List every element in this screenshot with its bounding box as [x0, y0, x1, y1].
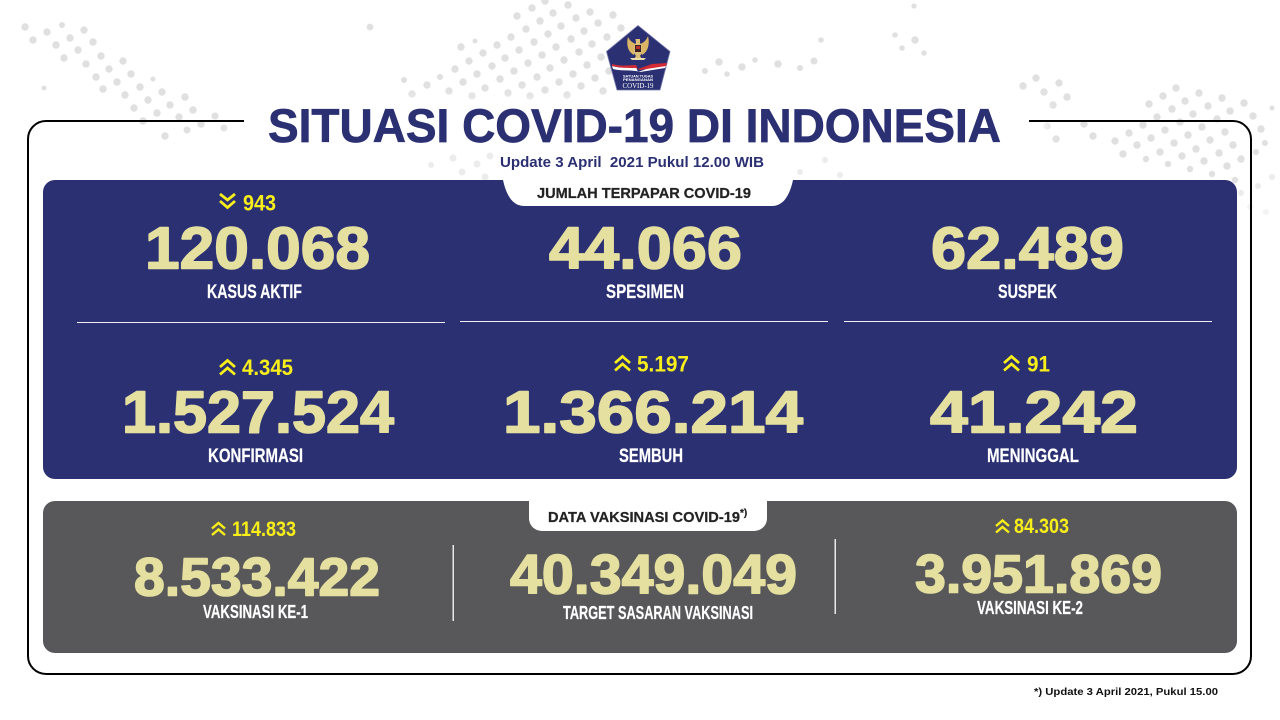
white glow behind title [235, 102, 1045, 176]
tab: panel heading: JUMLAH TERPAPAR COVID-19 [537, 185, 751, 202]
stat: spesimen: 44.066 [549, 216, 742, 282]
tab: vaccination heading: *) [740, 508, 747, 519]
title: SITUASI COVID-19 DI INDONESIA [268, 99, 1001, 152]
panel: vaccination data [43, 501, 1237, 653]
stat: vaksinasi ke-1: VAKSINASI KE-1 [203, 602, 308, 622]
stat: konfirmasi: KONFIRMASI [208, 446, 303, 467]
stat: sembuh: 1.366.214 [503, 380, 803, 446]
update date subtitle: Update 3 April 2021 Pukul 12.00 WIB [500, 154, 764, 171]
stat: vaksinasi ke-1: 114.833 [232, 518, 296, 541]
background halftone dots: left band [21, 22, 227, 140]
background halftone dots: top centre band [367, 0, 625, 100]
stat: meninggal: 91 [1027, 352, 1050, 376]
stat: kasus aktif [145, 190, 370, 303]
footnote: *) Update 3 April 2021, Pukul 15.00 [1034, 687, 1218, 698]
tab: vaccination heading: DATA VAKSINASI COVID-19 [548, 509, 740, 526]
logo: Satgas COVID-19 pentagon badge: SATUAN TUGAS [623, 74, 654, 78]
tab: panel heading [503, 180, 793, 206]
logo: Satgas COVID-19 pentagon badge: PENANGANAN [623, 78, 653, 82]
stat: konfirmasi: 1.527.524 [122, 380, 394, 446]
stat: sembuh: SEMBUH [619, 446, 683, 467]
stat: kasus aktif: 943 [243, 190, 276, 216]
stat: konfirmasi [122, 355, 394, 467]
stat: meninggal: MENINGGAL [987, 446, 1079, 467]
stat: sembuh: 5.197 [637, 352, 689, 376]
logo: Satgas COVID-19 pentagon badge: COVID-19 [622, 82, 654, 90]
stat: vaksinasi ke-2: 3.951.869 [915, 544, 1162, 604]
stat: vaksinasi ke-2 [915, 515, 1162, 618]
stat: vaksinasi ke-2: VAKSINASI KE-2 [977, 598, 1083, 618]
faint dots beneath title [428, 152, 843, 180]
stat: spesimen: SPESIMEN [606, 282, 684, 303]
logo: Satgas COVID-19 pentagon badge [606, 26, 670, 90]
stat: target sasaran vaksinasi: 40.349.049 [510, 542, 797, 606]
outer rounded frame [28, 121, 1251, 674]
stat: meninggal [930, 352, 1138, 467]
stat: meninggal: 41.242 [930, 380, 1138, 446]
stat: kasus aktif: 120.068 [145, 216, 370, 282]
stat: suspek: SUSPEK [998, 282, 1057, 303]
stat: kasus aktif: KASUS AKTIF [207, 282, 302, 303]
stat: vaksinasi ke-1: 8.533.422 [134, 548, 380, 608]
stat: suspek: 62.489 [931, 216, 1124, 282]
tab: vaccination heading [529, 501, 767, 531]
panel: exposure statistics [43, 180, 1237, 479]
stat: vaksinasi ke-2: 84.303 [1014, 515, 1069, 538]
stat: sembuh [503, 352, 803, 467]
stat: target sasaran vaksinasi: TARGET SASARAN VAKSINASI [563, 603, 753, 623]
stat: vaksinasi ke-1 [134, 518, 380, 622]
stat: konfirmasi: 4.345 [242, 355, 293, 380]
background halftone dots: right band [1019, 74, 1275, 215]
background halftone dots: upper right scatter [702, 3, 927, 77]
